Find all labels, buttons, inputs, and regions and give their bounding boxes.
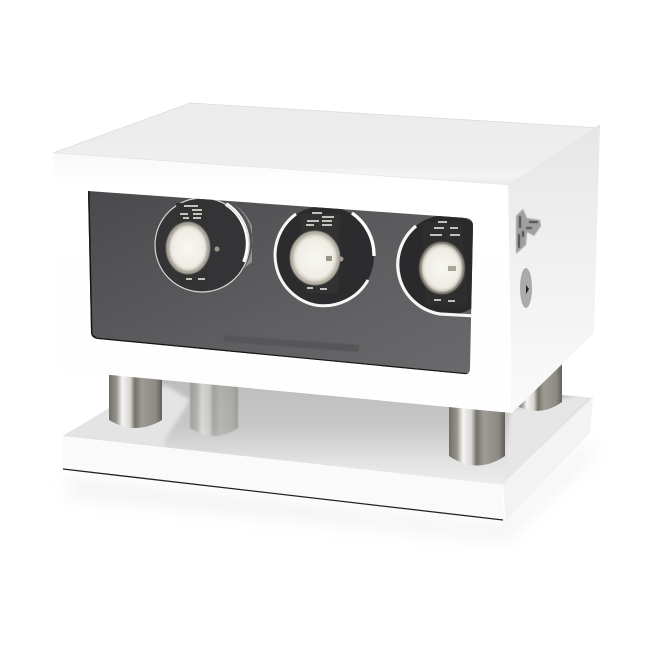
base rim bbox=[503, 398, 593, 485]
base top surface bbox=[63, 380, 593, 485]
watch 3 case bbox=[420, 243, 464, 293]
charger recess bbox=[224, 336, 360, 352]
winder slot 2 bbox=[274, 206, 374, 306]
cabinet right side bbox=[508, 124, 600, 413]
glass window bbox=[88, 191, 497, 375]
base right face bbox=[503, 398, 593, 521]
hinge / latch on side bbox=[516, 209, 541, 254]
lock bbox=[520, 268, 532, 308]
front left post bbox=[109, 370, 162, 428]
cabinet front bbox=[53, 153, 512, 413]
light reflection at left of base bbox=[55, 385, 190, 448]
cabinet top bbox=[53, 103, 600, 185]
front right post bbox=[449, 405, 505, 466]
watch 2 case bbox=[292, 232, 338, 284]
soft ground shadow bbox=[66, 440, 594, 540]
window dark edges bbox=[88, 191, 470, 375]
reflection of rear post bbox=[190, 380, 238, 436]
cabinet bbox=[53, 103, 600, 413]
watch 1 case bbox=[168, 224, 208, 272]
winder slot 3 bbox=[396, 216, 473, 318]
base plate bbox=[55, 380, 600, 521]
base bottom edge bbox=[63, 469, 503, 520]
winder slot 1 bbox=[155, 198, 252, 292]
watch 1 strap bbox=[176, 203, 182, 286]
light reflection at right of base bbox=[507, 396, 592, 456]
base front face bbox=[63, 436, 503, 521]
rear right post bbox=[515, 345, 562, 411]
